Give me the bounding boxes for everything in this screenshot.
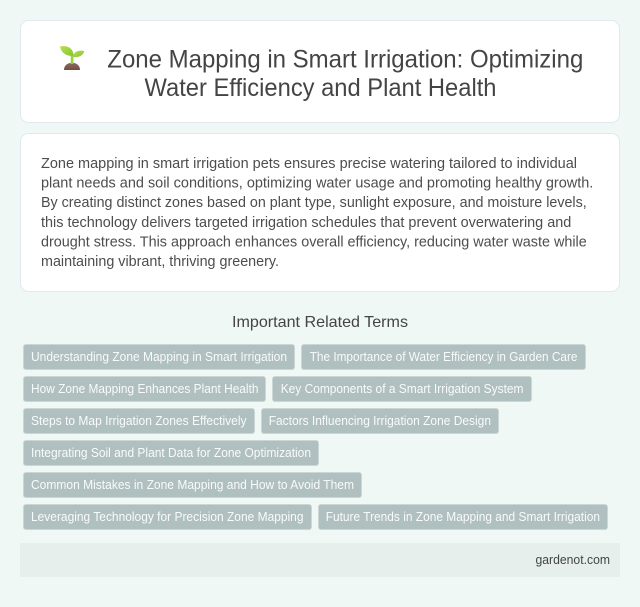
footer: site name: gardenot.com bbox=[536, 552, 610, 567]
chip: key components bbox=[272, 376, 532, 402]
text block: description: By creating distinct zones based on plant type, sunlight exposure, and moisture levels, bbox=[41, 195, 587, 211]
icon: seedling bbox=[60, 46, 84, 70]
chip: understanding: Understanding Zone Mapping in Smart Irrigation bbox=[31, 350, 287, 364]
chip: importance: The Importance of Water Efficiency in Garden Care bbox=[310, 350, 578, 364]
chip: understanding bbox=[24, 344, 294, 370]
chip: future trends bbox=[318, 504, 608, 530]
chip: leveraging bbox=[24, 504, 312, 530]
chips: related terms bbox=[24, 344, 608, 530]
chip: common mistakes: Common Mistakes in Zone Mapping and How to Avoid Them bbox=[31, 478, 354, 492]
chip: key components: Key Components of a Smart Irrigation System bbox=[281, 382, 524, 396]
chip: factors: Factors Influencing Irrigation Zone Design bbox=[269, 414, 491, 428]
chip: plant health bbox=[24, 376, 266, 402]
title: Zone Mapping in Smart Irrigation: Optimizing bbox=[107, 46, 583, 74]
text block: description: Zone mapping in smart irrigation pets ensures precise watering tailored to individual bbox=[41, 156, 577, 172]
chip: factors bbox=[262, 408, 498, 434]
chip: importance bbox=[302, 344, 586, 370]
chip: future trends: Future Trends in Zone Mapping and Smart Irrigation bbox=[326, 510, 600, 524]
panel: title card bbox=[20, 20, 620, 122]
chip: steps: Steps to Map Irrigation Zones Effectively bbox=[31, 414, 247, 428]
panel: description card bbox=[20, 134, 620, 292]
chip: common mistakes bbox=[24, 472, 362, 498]
chip: integrating: Integrating Soil and Plant Data for Zone Optimization bbox=[31, 446, 311, 460]
chip: plant health: How Zone Mapping Enhances Plant Health bbox=[31, 382, 259, 396]
text block: description bbox=[41, 156, 593, 270]
chip: steps bbox=[24, 408, 254, 434]
text block: description: drought stress. This approach enhances overall efficiency, reducing water waste while bbox=[41, 234, 587, 250]
title: Water Efficiency and Plant Health bbox=[144, 74, 496, 102]
chip: integrating bbox=[24, 440, 318, 466]
chip: leveraging: Leveraging Technology for Precision Zone Mapping bbox=[31, 510, 304, 524]
heading: related terms: Important Related Terms bbox=[232, 314, 408, 331]
text block: description: plant needs and soil conditions, optimizing water usage and promoting healthy growth. bbox=[41, 176, 593, 192]
text block: description: this technology delivers targeted irrigation schedules that prevent overwatering and bbox=[41, 215, 571, 231]
footer bbox=[20, 543, 620, 577]
text block: description: maintaining vibrant, thriving greenery. bbox=[41, 254, 279, 270]
title bbox=[107, 46, 583, 102]
